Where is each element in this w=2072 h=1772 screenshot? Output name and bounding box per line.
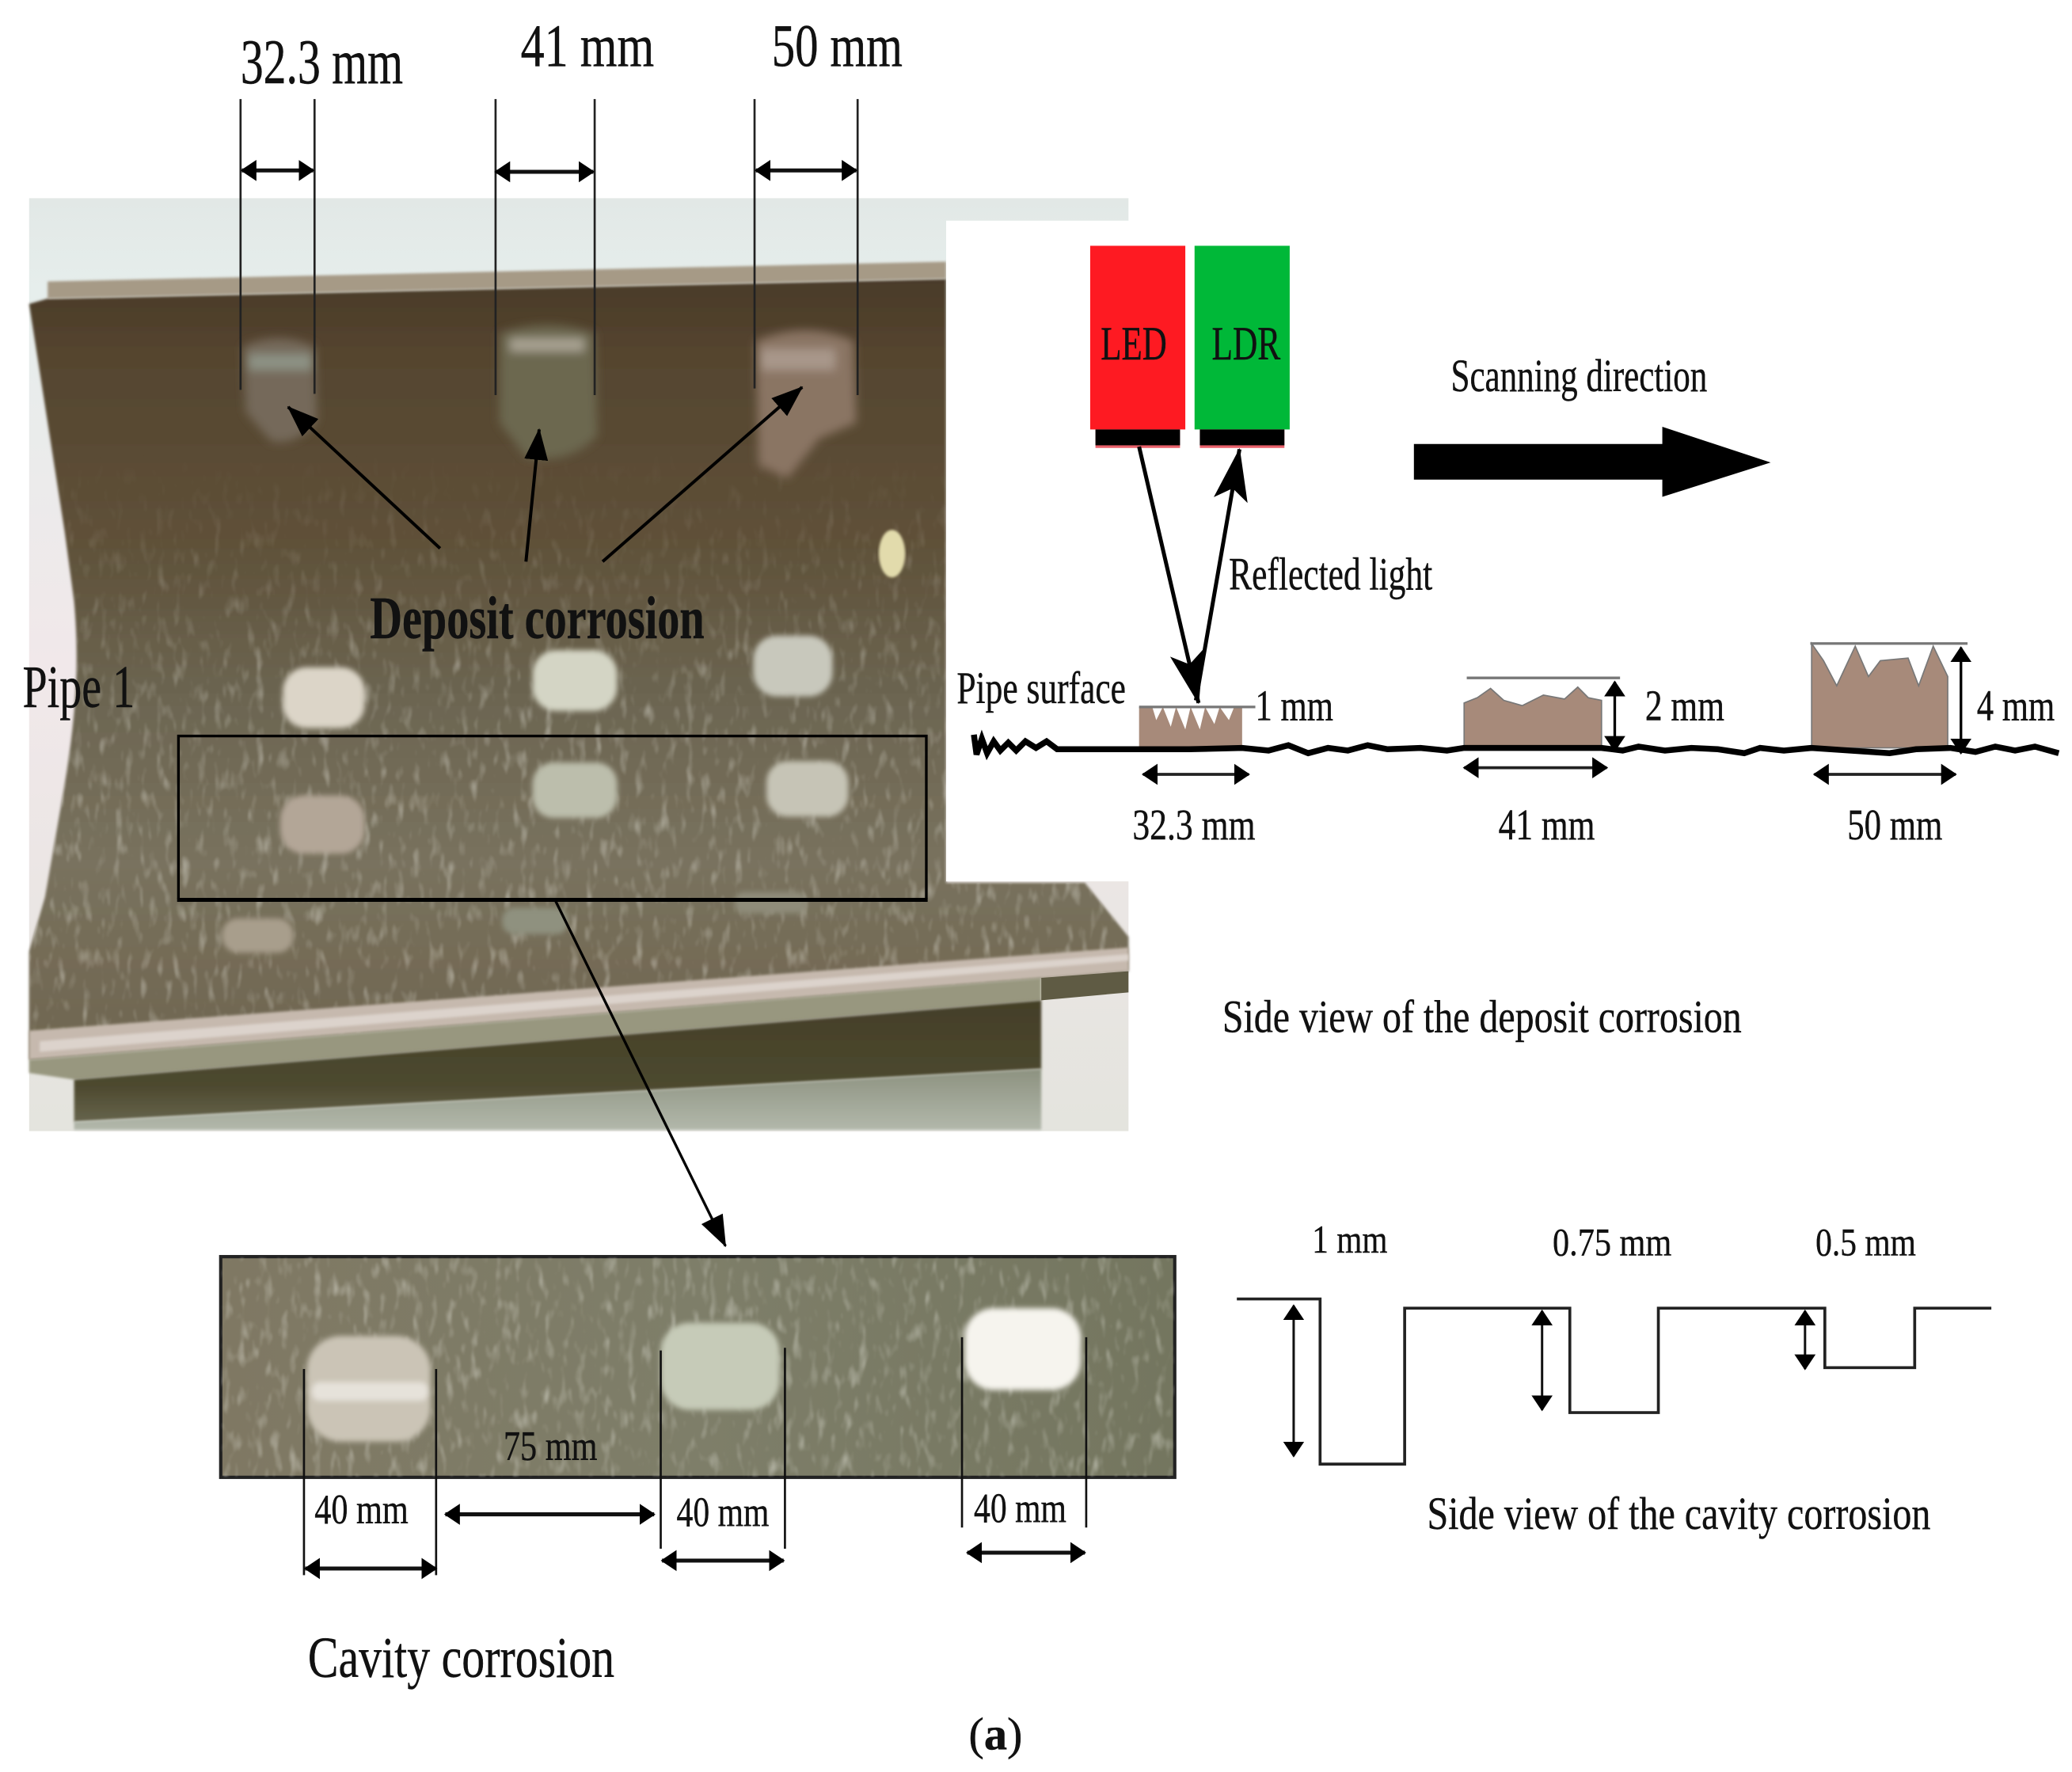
label: 32.3 mm: 32.3 mm	[241, 28, 403, 97]
height reference lines	[1139, 644, 1967, 707]
lower pipe rim	[29, 948, 1128, 1059]
surface speckle texture	[29, 494, 1115, 1029]
label: Pipe surface: Pipe surface	[956, 664, 1126, 713]
cavity: middle	[661, 1323, 780, 1410]
label: 0.5 mm depth: 0.5 mm	[1815, 1219, 1916, 1264]
green-grey band under rim	[29, 978, 1041, 1079]
depth arrow: 0.75 mm	[1542, 1311, 1543, 1410]
highlight rectangle	[178, 736, 926, 899]
label: Reflected light: Reflected light	[1229, 548, 1432, 599]
dimension arrows on photo	[241, 170, 857, 172]
profile line	[1237, 1299, 1991, 1464]
row of cavities: middle	[280, 761, 849, 854]
panel: cavity side profile	[1237, 1217, 1991, 1464]
label: Pipe 1: Pipe 1	[22, 653, 135, 721]
height arrow: 4 mm	[1960, 648, 1962, 753]
strip background	[221, 1257, 1175, 1477]
label: 50 mm width: 50 mm	[1847, 800, 1942, 849]
rim highlight	[40, 954, 1128, 1051]
label: Cavity corrosion: Cavity corrosion	[308, 1626, 614, 1690]
deposit profile: 4 mm	[1812, 644, 1948, 748]
label: 1 mm depth: 1 mm	[1312, 1217, 1387, 1261]
pipe surface line	[974, 735, 2059, 755]
label: 1 mm: 1 mm	[1256, 682, 1333, 730]
deposit profile: 1 mm	[1139, 707, 1242, 748]
upper pipe rim	[48, 261, 946, 299]
label: 40 mm right: 40 mm	[974, 1485, 1066, 1532]
label: Deposit corrosion: Deposit corrosion	[370, 584, 705, 652]
highlight rectangle bottom edge	[177, 899, 928, 901]
floor below shadow	[74, 1069, 1041, 1130]
scanning direction arrow	[1414, 427, 1770, 497]
reflected light arrow	[1196, 449, 1240, 701]
white panel behind the diagram	[946, 221, 2072, 881]
incident light arrow	[1139, 447, 1199, 703]
depth arrow: 1 mm	[1293, 1306, 1295, 1456]
cavity dimension arrows	[306, 1515, 1085, 1569]
dark tab at right	[1041, 972, 1128, 1000]
row of cavities: lower	[222, 892, 806, 953]
label: 2 mm: 2 mm	[1645, 682, 1724, 730]
label: Side view of the deposit corrosion: Side view of the deposit corrosion	[1222, 991, 1742, 1042]
label: 32.3 mm width: 32.3 mm	[1132, 800, 1256, 849]
arrows to deposits	[288, 387, 802, 561]
LED block: LED	[1101, 317, 1167, 370]
dimension lines on photo	[241, 99, 857, 395]
label: 41 mm width: 41 mm	[1499, 800, 1595, 849]
label: 40 mm middle: 40 mm	[677, 1489, 769, 1536]
deposit profile: 2 mm	[1464, 687, 1602, 748]
cavity dimension lines	[304, 1337, 1086, 1575]
deposit patches	[243, 325, 857, 478]
panel: pipe photograph	[27, 198, 1131, 1131]
pipe inner body	[29, 279, 1128, 1059]
panel: sensor scanning diagram	[956, 245, 2059, 849]
label: 41 mm: 41 mm	[521, 12, 654, 79]
panel: cavity corrosion strip	[221, 1257, 1175, 1477]
arrow to cavity strip	[555, 900, 725, 1246]
cavity: left	[306, 1336, 431, 1442]
width arrows	[1143, 768, 1956, 774]
label: 75 mm: 75 mm	[504, 1422, 597, 1470]
height arrow: 2 mm	[1614, 682, 1615, 751]
shadow below pipe	[74, 1000, 1041, 1122]
photo background	[29, 198, 1128, 1131]
LED block	[1090, 245, 1185, 448]
depth arrow: 0.5 mm	[1804, 1311, 1806, 1369]
LDR block	[1195, 245, 1290, 448]
strip speckle	[221, 1257, 1175, 1477]
LDR block: LDR	[1211, 317, 1280, 370]
label: 0.75 mm depth: 0.75 mm	[1553, 1219, 1671, 1264]
label: Side view of the cavity corrosion: Side view of the cavity corrosion	[1427, 1488, 1930, 1539]
cavity: right	[964, 1308, 1081, 1390]
label: 40 mm left: 40 mm	[314, 1485, 409, 1533]
label: Scanning direction: Scanning direction	[1451, 350, 1707, 401]
label: 50 mm: 50 mm	[772, 12, 903, 79]
cream paint spot	[879, 530, 905, 577]
row of cavities: upper	[283, 636, 832, 728]
caption: (a): (a)	[968, 1709, 1022, 1760]
